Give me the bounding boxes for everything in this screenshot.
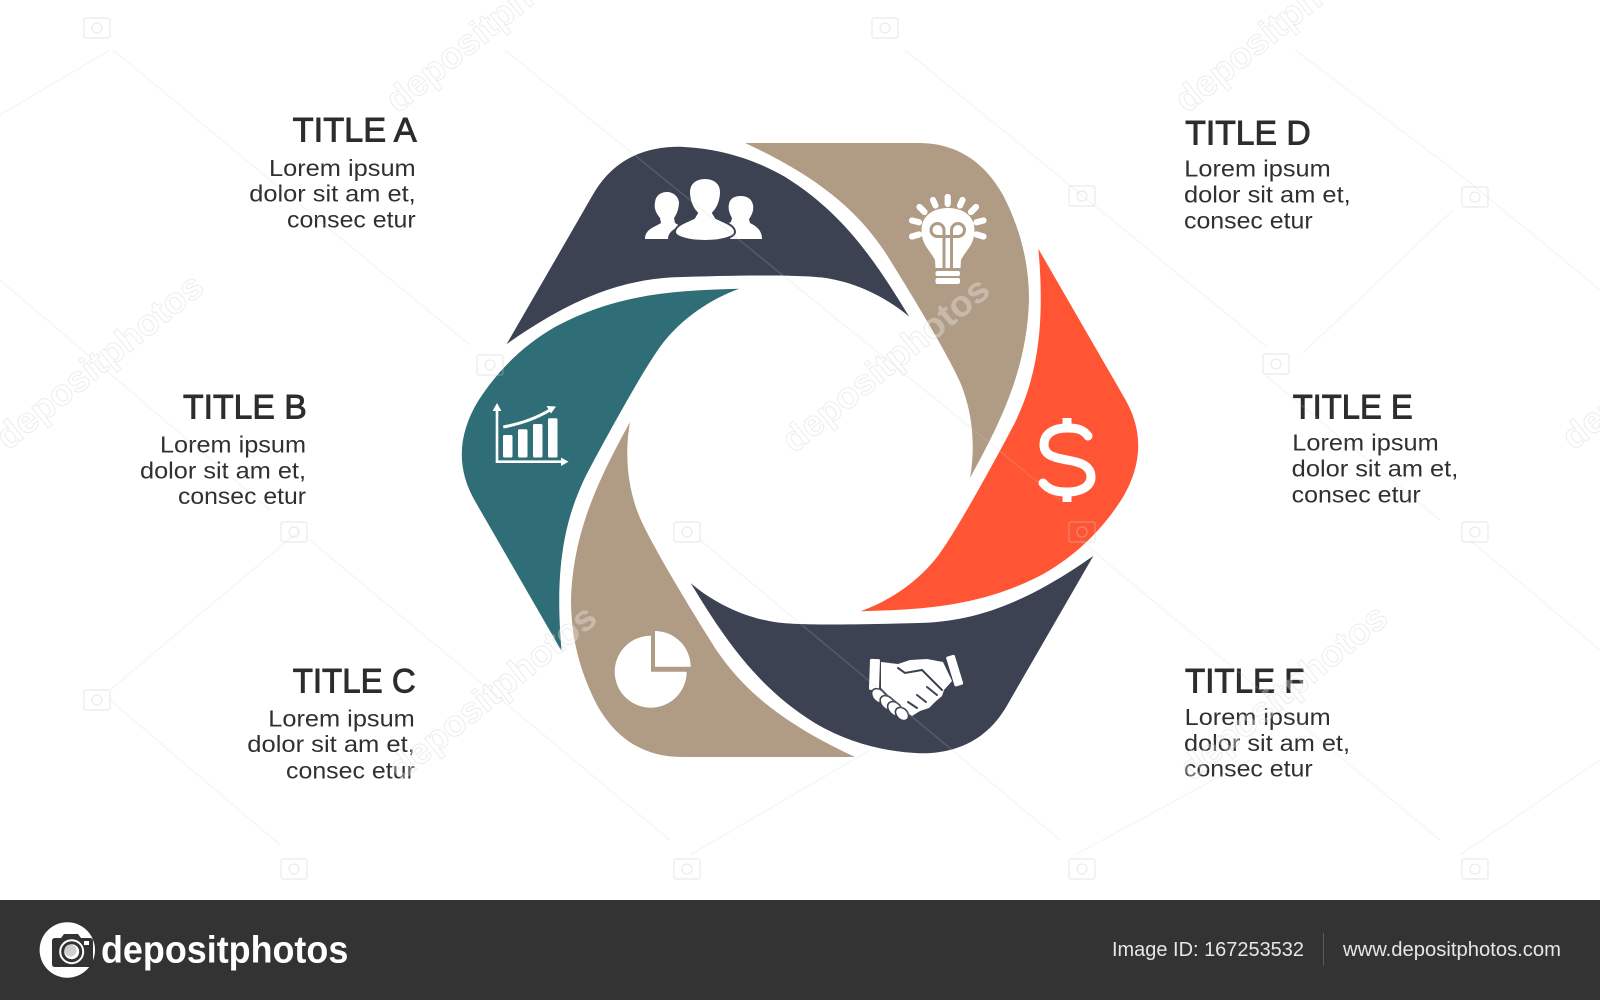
- watermark: repeated stock-photo marks: depositphotos: [1171, 596, 1395, 788]
- body: Title C copy: dolor sit am et,: [247, 731, 415, 757]
- watermark: repeated stock-photo marks: depositphotos: [773, 268, 997, 460]
- text block: Title A: [249, 112, 417, 232]
- segment: taupe top-right blade: [745, 143, 1029, 478]
- body: Title A copy: Lorem ipsum: [269, 155, 416, 181]
- text block: Title B: [140, 388, 307, 509]
- icon: group of people: [645, 178, 762, 241]
- body: Title B copy: Lorem ipsum: [160, 431, 306, 457]
- text block: Title D: [1184, 114, 1351, 233]
- heading: TITLE E: TITLE E: [1293, 388, 1413, 426]
- body: Title B copy: [140, 431, 306, 509]
- body: Title D copy: dolor sit am et,: [1184, 181, 1351, 207]
- segment: navy bottom blade: [661, 388, 1093, 802]
- body: Title F copy: Lorem ipsum: [1185, 704, 1331, 730]
- body: Title D copy: Lorem ipsum: [1184, 156, 1331, 182]
- text block: Title F: [1184, 663, 1350, 782]
- text block: Title E: [1292, 388, 1458, 508]
- body: Title E copy: [1292, 430, 1458, 508]
- body: Title F copy: consec etur: [1184, 756, 1313, 782]
- body: Title E copy: dolor sit am et,: [1292, 456, 1458, 482]
- heading: TITLE C: TITLE C: [293, 663, 416, 701]
- icon: dollar sign: [1043, 418, 1091, 502]
- image id: Image ID: 167253532: [1112, 939, 1304, 961]
- body: Title A copy: dolor sit am et,: [249, 181, 416, 207]
- body: Title C copy: [247, 706, 415, 783]
- heading: TITLE F: TITLE F: [1185, 663, 1304, 701]
- text block: Title C: [247, 663, 416, 783]
- body: Title D copy: consec etur: [1184, 207, 1313, 233]
- body: Title C copy: consec etur: [286, 757, 415, 783]
- website url: www.depositphotos.com: [1342, 939, 1561, 961]
- icon: light bulb: [912, 197, 984, 284]
- body: Title E copy: Lorem ipsum: [1292, 430, 1439, 456]
- segment: teal left blade: [420, 238, 852, 651]
- icon: handshake: [869, 654, 964, 723]
- watermark: repeated stock-photo marks: depositphotos: [380, 596, 604, 788]
- panel: hexagon cycle diagram: [420, 98, 1180, 802]
- footer bar: [0, 900, 1600, 1000]
- heading: TITLE D: TITLE D: [1185, 114, 1311, 152]
- body: Title E copy: consec etur: [1292, 482, 1421, 508]
- body: Title B copy: consec etur: [178, 483, 306, 509]
- icon: rising bar chart: [493, 403, 568, 466]
- body: Title F copy: [1184, 704, 1350, 782]
- body: Title C copy: Lorem ipsum: [268, 706, 415, 732]
- body: Title A copy: consec etur: [287, 206, 416, 232]
- segment: navy top blade: [507, 98, 939, 512]
- icon: pie chart: [615, 631, 691, 708]
- body: Title A copy: [249, 155, 416, 232]
- segment: orange right blade: [748, 249, 1180, 662]
- logo wordmark: depositphotos: [101, 929, 348, 971]
- body: Title B copy: dolor sit am et,: [140, 457, 306, 483]
- body: Title D copy: [1184, 156, 1351, 233]
- icon: camera logo: [40, 922, 95, 978]
- segment: taupe bottom-left blade: [571, 422, 855, 757]
- body: Title F copy: dolor sit am et,: [1184, 730, 1350, 756]
- heading: TITLE A: TITLE A: [293, 112, 417, 150]
- heading: TITLE B: TITLE B: [183, 388, 307, 426]
